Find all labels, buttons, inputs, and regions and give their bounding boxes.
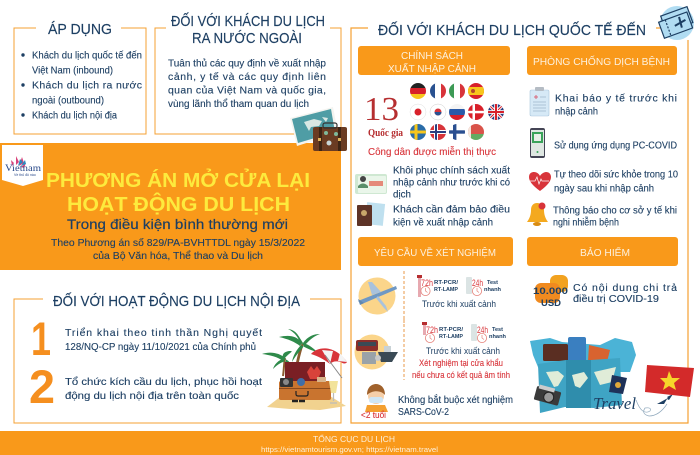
text: tuân thủ quy định: vùng lãnh thổ tham quan du lịch	[168, 98, 309, 110]
heading: quốc tế đến: ĐỐI VỚI KHÁCH DU LỊCH QUỐC TẾ ĐẾN	[378, 21, 646, 39]
list: đối tượng áp dụng: ngoài (outbound)	[32, 94, 104, 106]
title: HOẠT ĐỘNG DU LỊCH	[67, 192, 290, 216]
icon: air ticket	[657, 6, 695, 40]
icon: airplane	[358, 278, 397, 314]
label: quốc gia: Quốc gia	[368, 128, 403, 139]
text: tuân thủ quy định: quan của Việt Nam và quốc gia,	[168, 84, 326, 96]
text: nghị quyết: Triển khai theo tinh thần Nghị quyết	[65, 327, 262, 339]
icon: train and ship	[354, 334, 398, 370]
text: kích cầu: động du lịch nội địa trên toàn quốc	[65, 390, 239, 402]
text: khôi phục	[393, 164, 510, 200]
test group: before exit: 72h	[421, 278, 433, 288]
panel: hoạt động du lịch nội địa	[14, 292, 347, 423]
header: chính sách	[358, 46, 510, 75]
list: đối tượng áp dụng: Khách du lịch nội địa	[32, 110, 117, 122]
text: tuân thủ quy định	[168, 58, 326, 110]
test group: before exit: Trước khi xuất cảnh	[422, 299, 496, 310]
icon: bell	[527, 202, 548, 226]
source line: của Bộ Văn hóa, Thể thao và Du lịch	[93, 250, 263, 262]
heading: áp dụng: ÁP DỤNG	[48, 21, 112, 38]
text: điều kiện: Khách cần đảm bảo điều	[393, 204, 510, 216]
text: kích cầu: Tổ chức kích cầu du lịch, phục hồi hoạt	[65, 376, 262, 388]
text: không bắt buộc	[398, 393, 513, 418]
list: đối tượng áp dụng	[21, 50, 142, 122]
test group: before entry: RT-LAMP	[439, 334, 463, 340]
panel: khách du lịch quốc tế đến	[351, 6, 695, 423]
icon: coins 10.000 USD	[533, 275, 568, 309]
header: bảo hiểm: BẢO HIỂM	[580, 246, 630, 259]
test group: before exit: RT-LAMP	[434, 287, 458, 293]
source line	[51, 237, 305, 262]
text: nghị quyết	[65, 327, 262, 353]
source line: Theo Phương án số 829/PA-BVHTTDL ngày 15/3/2022	[51, 237, 305, 249]
text: chi trả covid	[573, 282, 677, 305]
text: theo dõi sức khỏe: Tự theo dõi sức khỏe trong 10	[554, 168, 678, 180]
text: miễn thị thực: Công dân được miễn thị thực	[368, 145, 496, 158]
text: pc-covid: Sử dụng ứng dụng PC-COVID	[554, 140, 677, 152]
title	[46, 168, 310, 216]
illustration: travel map and luggage	[530, 337, 673, 416]
text: xét nghiệm tại cửa khẩu: Xét nghiệm tại cửa khẩu	[419, 358, 503, 369]
header: xét nghiệm	[358, 237, 513, 266]
text: chi trả covid: Có nội dung chi trả	[573, 282, 677, 294]
text: thông báo: nghi nhiễm bệnh	[553, 216, 619, 228]
icon: heart	[529, 172, 551, 191]
test group: before entry: Trước khi xuất cảnh	[426, 346, 500, 357]
heading: ra nước ngoài: ĐỐI VỚI KHÁCH DU LỊCH	[171, 12, 325, 30]
text: xét nghiệm tại cửa khẩu: nếu chưa có kết quả âm tính	[412, 370, 510, 381]
text: travel: Travel	[593, 394, 636, 413]
test group: before entry: nhanh	[489, 334, 507, 340]
list: đối tượng áp dụng: Khách du lịch ra nước	[32, 80, 142, 92]
icon: vietnam flag	[645, 365, 694, 397]
text: xét nghiệm tại cửa khẩu	[412, 358, 510, 381]
footer: TỔNG CỤC DU LỊCH	[313, 433, 395, 444]
test group: before exit	[417, 275, 502, 310]
test group: before entry	[422, 322, 507, 357]
icon: coins 10.000 USD: 10.000	[533, 286, 568, 297]
header: phòng chống: PHÒNG CHỐNG DỊCH BỆNH	[533, 54, 670, 68]
subtitle: Trong điều kiện bình thường mới	[67, 217, 288, 232]
text: điều kiện: kiện về xuất nhập cảnh	[393, 216, 493, 228]
icon: coins 10.000 USD: USD	[541, 298, 561, 309]
header: chính sách: CHÍNH SÁCH	[401, 49, 463, 62]
illustration: beach suitcase	[262, 329, 347, 410]
text: theo dõi sức khỏe	[554, 168, 678, 194]
banner	[0, 143, 341, 270]
header: xét nghiệm: YÊU CẦU VỀ XÉT NGHIỆM	[374, 246, 496, 259]
test group: before entry: 24h	[477, 325, 488, 335]
heading: ra nước ngoài	[171, 12, 325, 47]
section: bảo hiểm	[527, 237, 694, 416]
title: PHƯƠNG ÁN MỞ CỬA LẠI	[46, 168, 310, 192]
icon: visa card	[355, 174, 387, 194]
number 2: 2	[29, 360, 55, 413]
text: khôi phục: dịch	[393, 188, 411, 200]
heading: ra nước ngoài: RA NƯỚC NGOÀI	[192, 30, 302, 47]
icon: passport	[357, 202, 385, 226]
text: tuân thủ quy định: Tuân thủ các quy định về xuất nhập	[168, 58, 326, 70]
text: theo dõi sức khỏe: ngày sau khi nhập cảnh	[554, 182, 654, 194]
icon: map and suitcase	[290, 107, 347, 151]
header: chính sách: XUẤT NHẬP CẢNH	[388, 62, 476, 75]
text: khôi phục: nhập cảnh như trước khi có	[393, 176, 510, 188]
number 1: 1	[31, 312, 51, 365]
footer: https://vietnamtourism.gov.vn; https://vietnam.travel	[261, 445, 438, 454]
test group: before entry: 72h	[426, 325, 438, 335]
header: bảo hiểm	[527, 237, 678, 266]
icon: child with mask	[365, 384, 388, 412]
flags	[410, 83, 504, 140]
logo: Vietnam: Về thủ đô nào	[14, 173, 36, 177]
test group: before exit: nhanh	[484, 287, 502, 293]
label: under 2 years: <2 tuổi	[361, 410, 386, 420]
footer	[0, 431, 700, 455]
header: phòng chống	[527, 46, 677, 75]
text: điều kiện	[393, 204, 510, 228]
text: thông báo: Thông báo cho cơ sở y tế khi	[553, 204, 677, 216]
text: nghị quyết: 128/NQ-CP ngày 11/10/2021 của Chính phủ	[65, 341, 256, 353]
text: thông báo	[553, 204, 677, 228]
logo: Vietnam	[2, 145, 43, 186]
test group: before exit: Test	[487, 280, 498, 286]
test group: before exit: RT-PCR/	[434, 280, 459, 286]
text: khai báo y tế: Khai báo y tế trước khi	[555, 92, 677, 104]
logo: Vietnam: Vietnam	[5, 163, 41, 173]
text: tuân thủ quy định: cảnh, y tế và các quy định liên	[168, 71, 326, 83]
section: chính sách xuất nhập cảnh	[355, 46, 510, 228]
panel: áp dụng	[14, 21, 146, 134]
text: không bắt buộc: SARS-CoV-2	[398, 406, 449, 418]
panel: khách du lịch ra nước ngoài	[155, 12, 341, 134]
test group: before entry: Test	[492, 327, 503, 333]
list: đối tượng áp dụng: Khách du lịch quốc tế đến	[32, 50, 142, 62]
text: khai báo y tế: nhập cảnh	[555, 106, 598, 118]
heading: nội địa: ĐỐI VỚI HOẠT ĐỘNG DU LỊCH NỘI ĐỊA	[53, 292, 300, 310]
test group: before exit: 24h	[472, 278, 483, 288]
number 13: 13	[364, 91, 399, 128]
text: kích cầu	[65, 376, 262, 402]
section: phòng chống dịch bệnh	[527, 46, 678, 228]
text: không bắt buộc: Không bắt buộc xét nghiệm	[398, 393, 513, 406]
icon: phone	[530, 128, 545, 158]
icon: clipboard	[530, 87, 549, 116]
text: khôi phục: Khôi phục chính sách xuất	[393, 164, 510, 176]
text: khai báo y tế	[555, 92, 677, 118]
test group: before entry: RT-PCR/	[439, 327, 464, 333]
text: chi trả covid: điều trị COVID-19	[573, 293, 659, 305]
section: yêu cầu về xét nghiệm	[354, 237, 513, 420]
list: đối tượng áp dụng: Việt Nam (inbound)	[32, 64, 113, 76]
